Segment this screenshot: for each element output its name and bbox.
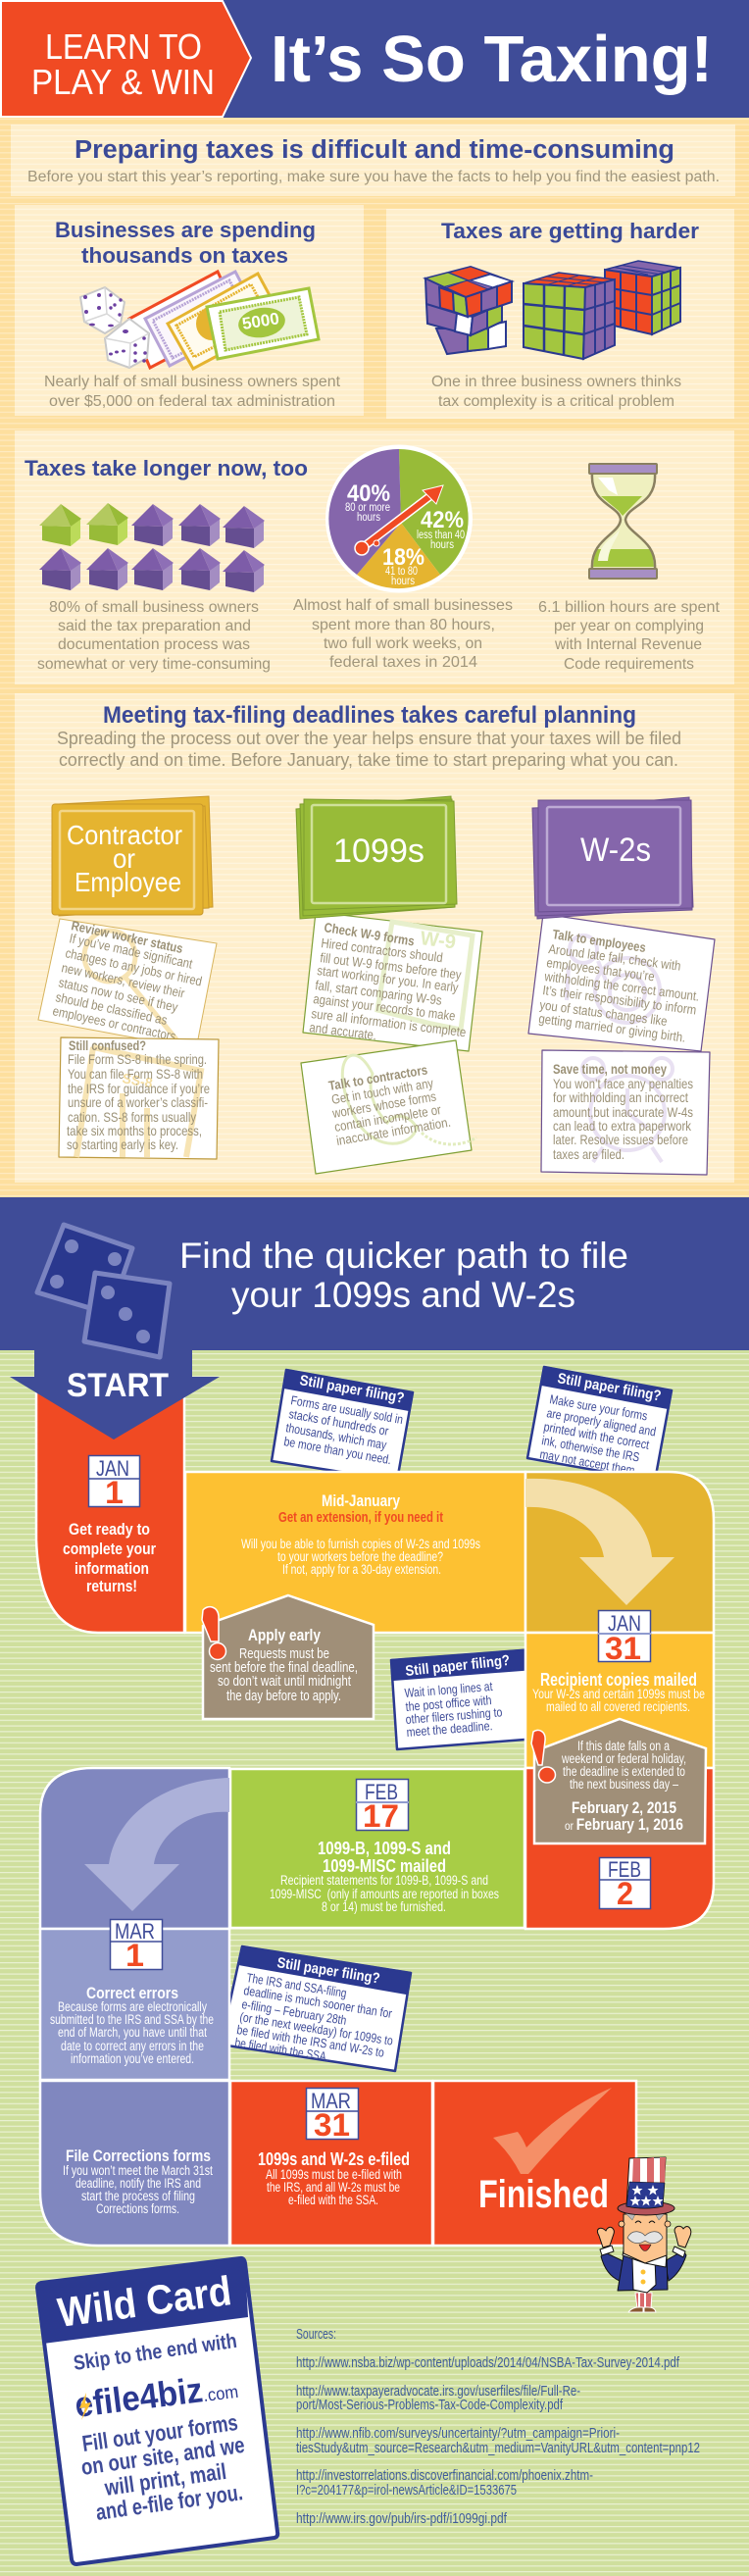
icon: right cube xyxy=(605,261,680,334)
note: review worker status: If you’ve made significant xyxy=(68,931,194,972)
label: 18 percent xyxy=(382,544,424,587)
text: get ready: Get ready to xyxy=(69,1520,150,1539)
still paper filing: card two: Make sure your forms xyxy=(548,1391,649,1424)
note: save time, not money: later. Resolve issues before xyxy=(553,1132,688,1147)
tag: learn to play and win: LEARN TO xyxy=(45,26,202,67)
sources: http://www.irs.gov/pub/irs-pdf/i1099gi.pdf xyxy=(296,2510,508,2527)
label: 40 percent: 80 or more xyxy=(345,502,390,514)
callout: deadline extended: If this date falls on a xyxy=(577,1739,670,1753)
label: 18 percent: 18% xyxy=(382,544,424,571)
note: still confused: unsure of a worker’s classifi- xyxy=(68,1094,208,1110)
note: talk to employees: getting married or giving birth. xyxy=(538,1011,686,1045)
board square: finished: Finished xyxy=(478,2173,609,2216)
board square: Feb 17: 1099-MISC mailed xyxy=(323,1856,446,1876)
calendar: Feb 17: FEB xyxy=(365,1780,398,1804)
still paper filing: card four: The IRS and SSA-filing xyxy=(246,1970,348,2000)
sources: port/Most-Serious-Problems-Tax-Code-Complexity.pdf xyxy=(296,2397,564,2413)
still paper filing: card two: printed with the correct xyxy=(542,1419,651,1452)
icon: twisted cube xyxy=(425,267,512,354)
board square: Mar 31 xyxy=(230,2081,432,2246)
still paper filing: card three: Still paper filing? xyxy=(405,1652,511,1680)
note: talk to employees: withholding the correct amount. xyxy=(543,969,700,1004)
icon: hourglass xyxy=(589,464,657,579)
calendar: Mar 1 xyxy=(110,1919,163,1973)
panel: taxes take longer xyxy=(15,430,734,684)
still paper filing: card four: be filed with the IRS and W-2s to xyxy=(236,2022,385,2060)
note: talk to contractors: contain incomplete or xyxy=(333,1102,442,1135)
caption: 6.1 billion: 6.1 billion hours are spent xyxy=(538,599,721,616)
note: save time, not money: You won’t face any penalties xyxy=(553,1076,693,1091)
icon: die one xyxy=(37,1225,132,1314)
text: get ready xyxy=(63,1520,156,1595)
board square: file corrections: If you won’t meet the March 31st xyxy=(63,2163,213,2178)
calendar: Jan 1: 1 xyxy=(105,1475,124,1510)
heading: businesses xyxy=(55,218,316,268)
calendar: Mar 31: MAR xyxy=(311,2089,351,2113)
panel: meeting deadlines xyxy=(15,693,734,1183)
callout: apply early: the day before to apply. xyxy=(226,1689,341,1704)
note: still confused: cation. SS-8 forms usually xyxy=(68,1109,196,1125)
caption: 6.1 billion xyxy=(538,599,721,673)
note: still confused: the IRS for guidance if you’re xyxy=(68,1081,210,1096)
text: fill out your forms: Fill out your forms xyxy=(80,2409,239,2456)
board square: Feb 17: 1099-B, 1099-S and xyxy=(318,1839,451,1858)
callout: apply early: so don’t wait until midnight xyxy=(218,1674,351,1690)
callout: deadline extended: February 2, 2015 xyxy=(572,1799,676,1817)
board square: correct errors xyxy=(40,1929,229,2080)
callout: apply early: Apply early xyxy=(248,1626,321,1644)
board square: file corrections: deadline, notify the IRS and xyxy=(75,2176,201,2191)
board square: Mar 31: e-filed with the SSA. xyxy=(288,2193,378,2207)
illustration: Uncle Sam xyxy=(597,2157,691,2312)
board square: Feb 17 xyxy=(230,1769,524,1928)
intro: spreading the process: correctly and on time. Before January, take time to start preparing what you can. xyxy=(59,750,678,770)
caption: almost half xyxy=(293,597,513,671)
panel: intro xyxy=(11,125,735,196)
note: talk to contractors: Talk to contractors xyxy=(327,1062,428,1093)
heading: find the quicker path: your 1099s and W-2s xyxy=(231,1275,575,1315)
icon: play money xyxy=(129,272,319,369)
heading: find the quicker path xyxy=(179,1236,628,1315)
caption: 80 percent: 80% of small business owners xyxy=(49,599,259,616)
sources: http://investorrelations.discoverfinancial.com/phoenix.zhtm- xyxy=(296,2467,593,2484)
board square: recipient copies mailed: mailed to all covered recipients. xyxy=(546,1699,690,1714)
still paper filing: card two: Still paper filing? xyxy=(556,1370,663,1405)
note: talk to employees: you of status changes like xyxy=(539,997,668,1029)
still paper filing: card four: Still paper filing? xyxy=(275,1954,381,1988)
card stack: contractor or employee: Employee xyxy=(75,867,181,897)
text: fill out your forms xyxy=(79,2409,246,2525)
calendar: Jan 1: JAN xyxy=(96,1456,129,1481)
note: review worker status xyxy=(38,918,217,1049)
note: review worker status: changes to any jobs or hired xyxy=(64,945,203,988)
still paper filing: card four: deadline is much sooner than for xyxy=(243,1983,394,2021)
note: talk to employees: employees that you’re xyxy=(546,955,656,984)
heading: harder: Taxes are getting harder xyxy=(441,219,699,243)
card stack: W-2s: W-2s xyxy=(580,832,651,869)
note: review worker status: Review worker status xyxy=(70,918,184,956)
calendar: Mar 1: 1 xyxy=(125,1938,144,1973)
still paper filing: card one: thousands, which may xyxy=(284,1420,388,1452)
note: still confused: File Form SS-8 in the spring. xyxy=(68,1051,207,1067)
card stack: contractor or employee: or xyxy=(113,843,135,874)
callout: apply early: sent before the final deadline, xyxy=(210,1660,358,1676)
board square: file corrections: File Corrections forms xyxy=(66,2147,211,2165)
board square: Feb 17: 1099-MISC (only if amounts are reported in boxes xyxy=(270,1887,499,1901)
board square: correct errors: Correct errors xyxy=(86,1984,178,2002)
label: 42 percent: 42% xyxy=(421,507,464,533)
caption: 80 percent: documentation process was xyxy=(58,636,250,653)
icon: exclamation xyxy=(202,1607,225,1659)
heading: businesses: Businesses are spending xyxy=(55,218,316,242)
panel: find the quicker path header xyxy=(0,1197,749,1350)
label: 18 percent: hours xyxy=(391,576,415,587)
board square: Mar 31: 1099s and W-2s e-filed xyxy=(258,2149,410,2169)
board square: recipient copies mailed: Recipient copies mailed xyxy=(540,1670,697,1690)
board square: mid-January: If not, apply for a 30-day extension. xyxy=(282,1562,441,1577)
caption: one in three xyxy=(431,374,681,410)
label: 42 percent xyxy=(417,507,465,551)
text: get ready: complete your xyxy=(63,1540,156,1558)
caption: 6.1 billion: with Internal Revenue xyxy=(554,636,702,653)
note: still confused: take six months to process, xyxy=(67,1123,202,1138)
text: get ready: returns! xyxy=(86,1577,137,1595)
label: 40 percent xyxy=(345,480,390,524)
card: wild card xyxy=(37,2258,277,2564)
text: fill out your forms: on our site, and we xyxy=(79,2432,246,2480)
calendar: Feb 17 xyxy=(356,1779,409,1834)
background: green lower section xyxy=(0,1350,749,2576)
caption: almost half: federal taxes in 2014 xyxy=(329,654,477,671)
callout: deadline extended: weekend or federal holiday, xyxy=(561,1751,686,1766)
calendar: Mar 31: 31 xyxy=(314,2107,350,2143)
board square: mid-January xyxy=(185,1472,525,1633)
board square: Jan 1 xyxy=(36,1373,184,1633)
arrow: spinner xyxy=(355,485,443,555)
icon: middle cube xyxy=(524,273,615,359)
heading: meeting deadlines: Meeting tax-filing deadlines takes careful planning xyxy=(103,702,636,729)
board square: mid-January: Will you be able to furnish copies of W-2s and 1099s xyxy=(241,1537,480,1551)
note: talk to contractors: workers whose forms xyxy=(330,1088,437,1121)
note: review worker status: should be classified as xyxy=(54,989,169,1028)
caption: nearly half: over $5,000 on federal tax administration xyxy=(49,393,335,410)
title: It’s So Taxing! xyxy=(271,23,713,96)
board square: Mar 31: the IRS, and all W-2s must be xyxy=(267,2180,400,2195)
caption: 6.1 billion: Code requirements xyxy=(564,656,694,673)
callout: apply early: Requests must be xyxy=(239,1646,329,1662)
logo: efile4biz: efile4biz.com xyxy=(73,2365,240,2425)
note: check W-9 forms: start working for you. In early xyxy=(317,963,460,995)
card stack: 1099s: 1099s xyxy=(333,833,424,870)
sources: I?c=204177&p=irol-newsArticle&ID=1533675 xyxy=(296,2482,517,2499)
label: 40 percent: hours xyxy=(357,512,380,524)
arrow: start xyxy=(10,1350,220,1440)
board square: mid-January: Get an extension, if you need it xyxy=(278,1510,443,1526)
still paper filing: card one: be more than you need. xyxy=(282,1434,392,1467)
note: check W-9 forms: sure all information is complete xyxy=(311,1006,467,1039)
calendar: Feb 17: 17 xyxy=(363,1798,399,1834)
board square: correct errors: end of March, you have until that xyxy=(58,2025,207,2040)
board square: correct errors: information you’ve entered. xyxy=(71,2051,194,2066)
arrow: start: START xyxy=(67,1367,169,1404)
note: check W-9 forms: against your records to make xyxy=(313,991,456,1024)
still paper filing: card one: stacks of hundreds or xyxy=(287,1406,390,1439)
panel: taxes are getting harder xyxy=(386,209,734,419)
board square: mid-January: to your workers before the deadline? xyxy=(277,1549,443,1564)
calendar: Jan 31 xyxy=(598,1610,651,1666)
calendar: Jan 31: JAN xyxy=(608,1611,641,1636)
caption: almost half: two full work weeks, on xyxy=(324,635,482,652)
arrow: curved periwinkle xyxy=(84,1778,229,1911)
text: fill out your forms: and e-file for you. xyxy=(94,2479,244,2525)
still paper filing: card three: other filers rushing to xyxy=(405,1704,503,1727)
heading: find the quicker path: Find the quicker path to file xyxy=(179,1236,628,1276)
label: 42 percent: hours xyxy=(430,539,454,551)
arrow: curved gold xyxy=(525,1479,674,1605)
heading: taxes take longer: Taxes take longer now, too xyxy=(25,456,308,480)
board square: recipient copies mailed: Your W-2s and certain 1099s must be xyxy=(532,1687,705,1701)
tag: learn to play and win: PLAY & WIN xyxy=(31,62,215,102)
still paper filing: card one: Still paper filing? xyxy=(298,1372,406,1407)
board square: file corrections xyxy=(40,2081,229,2246)
heading: intro: Preparing taxes is difficult and time-consuming xyxy=(75,136,674,164)
note: talk to contractors: inaccurate information. xyxy=(335,1115,452,1148)
note: save time, not money xyxy=(541,1050,710,1175)
board square: finished xyxy=(433,2081,636,2246)
note: talk to contractors: Get in touch with any xyxy=(330,1076,434,1107)
pie chart xyxy=(325,445,473,592)
still paper filing: card one xyxy=(272,1370,413,1481)
icon: dice xyxy=(80,287,149,368)
caption: nearly half xyxy=(44,374,341,410)
intro: spreading the process xyxy=(57,729,681,770)
text: get ready: information xyxy=(75,1559,149,1578)
calendar: Jan 31: 31 xyxy=(605,1631,641,1666)
intro: spreading the process: Spreading the process out over the year helps ensure that your taxes will be filed xyxy=(57,729,681,748)
board square: Feb 2 xyxy=(525,1768,714,1929)
note: talk to employees: It’s their responsibility to inform xyxy=(542,983,697,1018)
caption: 80 percent xyxy=(37,599,271,673)
note: talk to employees: Talk to employees xyxy=(552,927,647,955)
board square: Feb 17: 8 or 14) must be furnished. xyxy=(322,1899,446,1914)
note: check W-9 forms: W-9 xyxy=(419,928,457,953)
label: 42 percent: less than 40 xyxy=(417,530,465,541)
note: still confused: SS-8 xyxy=(121,1070,154,1090)
still paper filing: card two: may not accept them. xyxy=(538,1446,639,1478)
sources: http://www.nfib.com/surveys/uncertainty/?utm_campaign=Priori- xyxy=(296,2425,620,2442)
note: talk to employees: Around late fall, check with xyxy=(548,941,681,974)
board square: file corrections: Corrections forms. xyxy=(96,2201,179,2216)
note: save time, not money: amount,but inaccurate W-4s xyxy=(553,1104,693,1120)
caption: nearly half: Nearly half of small business owners spent xyxy=(44,374,341,390)
still paper filing: card one: Forms are usually sold in xyxy=(289,1392,404,1427)
icon: exclamation xyxy=(531,1730,555,1783)
caption: almost half: spent more than 80 hours, xyxy=(312,617,495,633)
icon: play money: 5000 xyxy=(241,309,280,333)
header banner xyxy=(0,0,749,118)
callout: apply early xyxy=(202,1595,374,1719)
still paper filing: card three xyxy=(391,1649,537,1749)
board square: mid-January: Mid-January xyxy=(322,1491,400,1510)
sources: Sources: xyxy=(296,2326,336,2343)
note: check W-9 forms: fall, start comparing W-9s xyxy=(315,978,443,1008)
note: check W-9 forms xyxy=(303,912,482,1051)
calendar: Mar 31 xyxy=(306,2089,359,2143)
still paper filing: card four xyxy=(221,1946,411,2071)
card stack: contractor or employee: Contractor xyxy=(67,820,182,850)
board corner: gold with arrow xyxy=(525,1472,714,1633)
calendar: Mar 1: MAR xyxy=(115,1919,155,1944)
still paper filing: card four: (or the next weekday) for 1099s to xyxy=(239,2009,394,2048)
caption: almost half: Almost half of small businesses xyxy=(293,597,513,614)
note: check W-9 forms: Hired contractors should xyxy=(321,935,444,965)
caption: 6.1 billion: per year on complying xyxy=(554,618,704,634)
note: still confused xyxy=(59,1037,219,1159)
tag: learn to play and win xyxy=(1,1,251,117)
board corner: periwinkle with arrow xyxy=(40,1768,229,1929)
board square: recipient copies mailed xyxy=(525,1633,714,1768)
calendar: Jan 1 xyxy=(88,1455,140,1510)
note: still confused: Still confused? xyxy=(69,1037,146,1053)
still paper filing: card two: are properly aligned and xyxy=(545,1405,657,1440)
board square: file corrections: start the process of filing xyxy=(81,2189,195,2203)
still paper filing: card four: be filed with the SSA. xyxy=(234,2035,330,2064)
caption: 80 percent: somewhat or very time-consuming xyxy=(37,656,271,673)
caption: 80 percent: said the tax preparation and xyxy=(58,618,251,634)
label: 40 percent: 40% xyxy=(347,480,390,507)
still paper filing: card three: the post office with xyxy=(405,1692,492,1714)
calendar: Feb 2: FEB xyxy=(608,1857,641,1882)
note: check W-9 forms: and accurate. xyxy=(309,1020,377,1042)
icon: ten houses xyxy=(39,503,265,592)
board square: correct errors: submitted to the IRS and SSA by the xyxy=(50,2012,214,2027)
still paper filing: card three: Wait in long lines at xyxy=(404,1679,493,1700)
calendar: Feb 2: 2 xyxy=(617,1876,633,1911)
board square: correct errors: date to correct any errors in the xyxy=(61,2039,204,2053)
card stack: contractor or employee xyxy=(52,796,213,916)
note: review worker status: status now to see if they xyxy=(57,975,179,1015)
intro text: Before you start this year’s reporting, make sure you have the facts to help you find the easiest path. xyxy=(27,169,720,185)
note: talk to contractors xyxy=(301,1040,476,1174)
note: still confused: You can file Form SS-8 with xyxy=(68,1066,203,1082)
background: yellow upper section xyxy=(0,118,749,1197)
note: review worker status: new workers, review their xyxy=(60,960,186,1001)
board square: Feb 17: Recipient statements for 1099-B, 1099-S and xyxy=(280,1873,488,1888)
board square: Mar 31: All 1099s must be e-filed with xyxy=(266,2167,402,2182)
callout: deadline extended: the next business day – xyxy=(570,1777,678,1792)
note: save time, not money: for withholding an incorrect xyxy=(553,1089,688,1105)
note: check W-9 forms: Check W-9 forms xyxy=(324,920,416,949)
sources xyxy=(296,2326,700,2527)
panel: businesses are spending xyxy=(15,205,364,416)
card: wild card: Wild Card xyxy=(55,2267,234,2336)
sources: http://www.taxpayeradvocate.irs.gov/userfiles/file/Full-Re- xyxy=(296,2383,580,2399)
callout: deadline extended xyxy=(531,1719,706,1844)
note: save time, not money: taxes are filed. xyxy=(553,1146,624,1162)
calendar: Feb 2 xyxy=(599,1857,651,1911)
still paper filing: card two xyxy=(527,1367,672,1481)
still paper filing: card four: e-filing – February 28th xyxy=(241,1996,348,2028)
icon: die two xyxy=(84,1273,170,1357)
still paper filing: card two: ink, otherwise the IRS xyxy=(540,1433,641,1465)
callout: deadline extended: the deadline is extended to xyxy=(563,1764,685,1779)
note: review worker status: employees or contractors xyxy=(51,1003,177,1044)
card stack: W-2s xyxy=(532,797,693,919)
card stack: 1099s xyxy=(296,796,457,919)
icon: check mark xyxy=(493,2088,612,2174)
card: wild card: Skip to the end with xyxy=(72,2330,238,2375)
label: 18 percent: 41 to 80 xyxy=(385,566,418,578)
caption: one in three: tax complexity is a critical problem xyxy=(438,393,674,410)
board square: correct errors: Because forms are electronically xyxy=(58,1999,207,2014)
text: fill out your forms: will print, mail xyxy=(102,2458,227,2500)
note: save time, not money: can lead to extra paperwork xyxy=(553,1118,692,1134)
still paper filing: card three: meet the deadline. xyxy=(406,1718,493,1740)
caption: one in three: One in three business owners thinks xyxy=(431,374,681,390)
note: check W-9 forms: fill out W-9 forms before they xyxy=(320,950,463,983)
note: still confused: so starting early is key. xyxy=(67,1136,178,1152)
note: save time, not money: Save time, not money xyxy=(553,1061,667,1077)
heading: businesses: thousands on taxes xyxy=(81,243,288,268)
note: talk to employees xyxy=(528,914,715,1051)
callout: deadline extended: or February 1, 2016 xyxy=(565,1816,683,1834)
